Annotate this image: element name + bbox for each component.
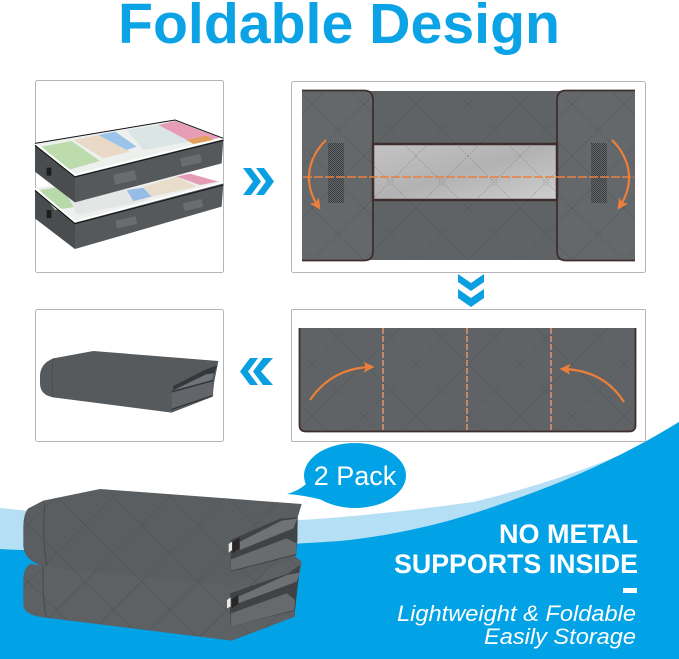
text block: no metal supports	[394, 519, 638, 649]
text block: no metal supports: Easily Storage	[484, 624, 636, 649]
panel: unfolded bag	[292, 82, 646, 272]
left flap	[302, 90, 373, 260]
upper bag	[35, 138, 223, 202]
icon: two stacked storage bags	[35, 120, 223, 249]
handles	[328, 143, 344, 203]
bag body	[300, 328, 636, 432]
arrow: left rotate	[309, 140, 326, 206]
icon: folded bag	[40, 351, 218, 413]
upper bag silhouette	[23, 489, 302, 586]
background wave: blue area	[0, 422, 679, 659]
panel: single folded bag	[36, 310, 224, 442]
text block: no metal supports: NO METAL	[499, 519, 638, 549]
upper bag end folds	[231, 517, 298, 572]
lower bag	[35, 183, 223, 249]
bag body	[302, 91, 635, 260]
icon: left chevrons	[240, 358, 273, 385]
lower bag end folds	[230, 565, 300, 627]
panel: open storage bags	[35, 80, 223, 272]
arrow: curve left	[564, 369, 624, 402]
right flap	[557, 90, 635, 260]
lower bag silhouette	[23, 555, 302, 641]
clear window	[373, 144, 557, 200]
arrow: curve right	[310, 367, 370, 400]
panel: flaps folded	[292, 310, 646, 442]
icon: stacked folded bags	[23, 489, 302, 641]
text block: no metal supports: Lightweight & Foldable	[397, 601, 636, 626]
callout: 2 Pack	[287, 443, 406, 508]
icon: down chevrons	[458, 274, 484, 307]
fold line	[303, 176, 634, 178]
arrow: right rotate	[612, 140, 629, 206]
callout: 2 Pack: 2 Pack	[314, 461, 397, 491]
icon: right chevrons	[243, 168, 274, 195]
fold lines	[383, 328, 551, 432]
background wave: light blue band	[0, 422, 679, 600]
text block: no metal supports: SUPPORTS INSIDE	[394, 549, 638, 579]
